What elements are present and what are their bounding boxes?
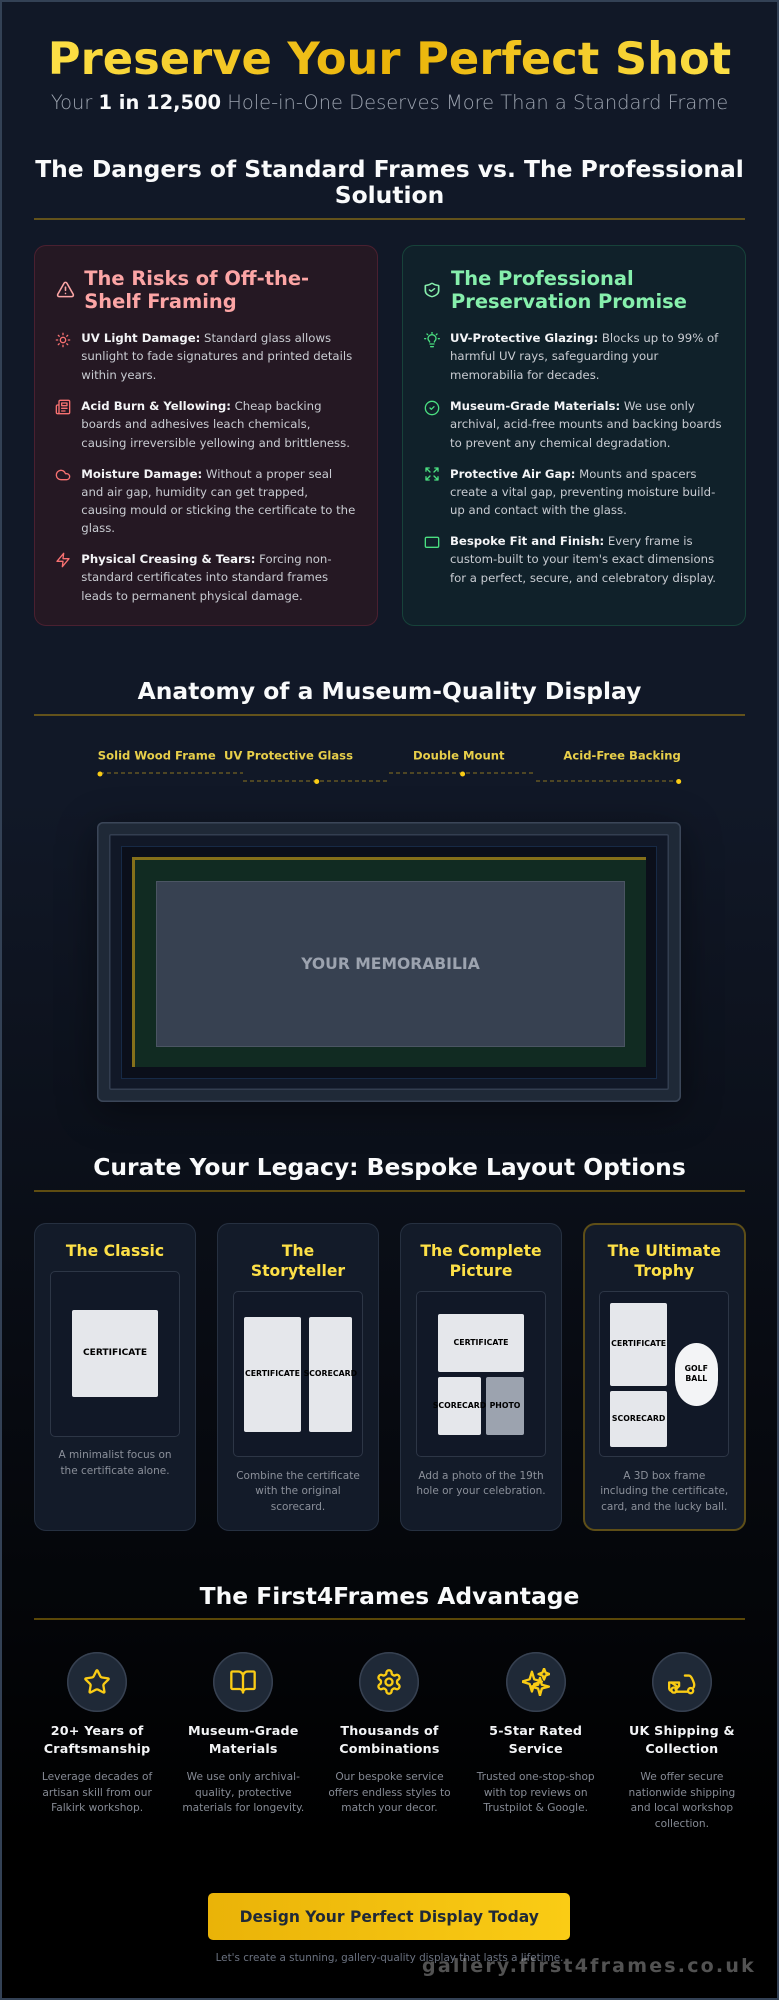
scorecard: SCORECARD (433, 1401, 486, 1410)
text: moisture damage: Moisture Damage: Without a proper seal (81, 467, 332, 481)
advantage title: Craftsmanship (44, 1741, 150, 1756)
advantage text (467, 1770, 605, 1817)
card description: A 3D box frame (623, 1470, 705, 1482)
call to action button: Design Your Perfect Display Today (240, 1908, 539, 1926)
layout diagram (416, 1291, 546, 1457)
card title (608, 1242, 721, 1280)
text: moisture damage: and air gap, humidity can get trapped, (81, 485, 308, 499)
panel heading: Preservation Promise (451, 290, 687, 313)
icon: cloud (56, 470, 70, 480)
frame layer: outer mount (121, 846, 657, 1079)
icon: sun (56, 332, 70, 348)
advantage title: UK Shipping & (629, 1723, 735, 1738)
advantage title (188, 1723, 299, 1756)
label: UV protective glass (224, 748, 390, 784)
golf ball: BALL (685, 1374, 707, 1383)
layout diagram (50, 1271, 180, 1437)
card description: A minimalist focus on (58, 1449, 172, 1461)
panel: professional preservation promise (402, 245, 746, 626)
scorecard: SCORECARD (304, 1369, 357, 1378)
label: double mount (389, 748, 536, 776)
certificate: CERTIFICATE (454, 1338, 508, 1347)
card description: card, and the lucky ball. (601, 1501, 727, 1513)
text: protective air gap: Protective Air Gap: Mounts and spacers (450, 467, 696, 481)
advantage text: nationwide shipping (629, 1787, 735, 1799)
label: double mount: Double Mount (413, 748, 505, 762)
diagram: layered frame (97, 822, 681, 1102)
advantage text: We offer secure (640, 1771, 723, 1783)
panel: risks of off-the-shelf framing (34, 245, 378, 626)
card: the classic (34, 1223, 196, 1531)
advantage title: Combinations (339, 1741, 440, 1756)
text: acid burn: boards and adhesives leach chemicals, (81, 417, 310, 431)
advantage text: materials for longevity. (182, 1802, 304, 1814)
text: museum-grade materials (450, 399, 722, 450)
text: protective air gap (450, 467, 715, 517)
heading: dangers vs solution: The Dangers of Standard Frames vs. The Professional (35, 155, 744, 183)
icon: open book (213, 1652, 273, 1712)
card title: Picture (450, 1262, 512, 1280)
frame layer: inner mount (132, 857, 646, 1067)
card title: The (282, 1242, 314, 1260)
advantage text: match your decor. (341, 1802, 438, 1814)
text: moisture damage: causing mould or sticking the certificate to the (81, 503, 355, 517)
icon: newspaper (56, 400, 70, 414)
advantage text: and local workshop (631, 1802, 733, 1814)
card description (600, 1470, 728, 1513)
card title (420, 1242, 542, 1280)
text: UV glazing: memorabilia for decades. (450, 368, 600, 382)
advantage text: offers endless styles to (328, 1787, 451, 1799)
advantage title: Thousands of (340, 1723, 439, 1738)
anatomy callout labels (98, 748, 682, 784)
text: UV glazing (450, 331, 718, 382)
photo (486, 1377, 524, 1435)
advantage: five-star service (476, 1652, 595, 1814)
text: UV glazing: UV-Protective Glazing: Blocks up to 99% of (450, 331, 718, 345)
icon: sparkles (506, 1652, 566, 1712)
advantage: museum-grade materials (182, 1652, 304, 1814)
icon: star (67, 1652, 127, 1712)
icon: rectangle (424, 536, 440, 548)
text: bespoke fit: for a perfect, secure, and celebratory display. (450, 571, 716, 585)
text: protective air gap: up and contact with the glass. (450, 503, 627, 517)
advantage: UK shipping (619, 1652, 745, 1842)
panel heading: The Risks of Off-the- (84, 267, 309, 290)
scorecard (610, 1391, 667, 1447)
icon: shield check (424, 282, 440, 298)
advantage title: 5-Star Rated (489, 1723, 582, 1738)
card title: Storyteller (251, 1262, 345, 1280)
heading: dangers vs solution (35, 155, 744, 209)
heading: dangers vs solution: Solution (335, 181, 444, 209)
text: UV light damage: within years. (81, 368, 156, 382)
advantage text: quality, protective (195, 1787, 292, 1799)
card title: The Classic (66, 1242, 164, 1260)
card description: including the certificate, (600, 1485, 728, 1497)
advantage title: Museum-Grade (188, 1723, 299, 1738)
advantage text: Trustpilot & Google. (483, 1802, 588, 1814)
text: physical creasing: standard certificates into standard frames (81, 570, 328, 584)
icon: gear (359, 1652, 419, 1712)
panel heading: The Professional (451, 267, 634, 290)
layout diagram (233, 1291, 363, 1457)
icon: scooter (652, 1652, 712, 1712)
panel heading (84, 267, 309, 313)
text: physical creasing: Physical Creasing & Tears: Forcing non- (81, 552, 332, 566)
card title: The Ultimate (608, 1242, 721, 1260)
certificate: CERTIFICATE (245, 1369, 300, 1378)
heading: anatomy: Anatomy of a Museum-Quality Display (138, 677, 641, 705)
text: bespoke fit: Bespoke Fit and Finish: Every frame is (450, 534, 693, 548)
text: moisture damage (81, 467, 355, 535)
heading: layout options: Curate Your Legacy: Bespoke Layout Options (93, 1153, 686, 1181)
frame layer: glass (109, 834, 669, 1090)
card title: The Complete (420, 1242, 542, 1260)
scorecard: SCORECARD (612, 1414, 665, 1423)
text: museum-grade materials: archival, acid-free mounts and backing boards (450, 417, 722, 431)
advantage text: Falkirk workshop. (51, 1802, 143, 1814)
icon: warning triangle (56, 282, 74, 298)
advantage text (182, 1771, 304, 1814)
layout diagram (599, 1291, 729, 1457)
advantage text: with top reviews on (484, 1787, 588, 1799)
card title (251, 1242, 346, 1280)
advantage text: collection. (655, 1818, 709, 1830)
advantage text: artisan skill from our (42, 1787, 152, 1799)
text: museum-grade materials: Museum-Grade Materials: We use only (450, 399, 695, 413)
text: physical creasing (81, 552, 332, 603)
card description: scorecard. (271, 1501, 325, 1513)
card: the storyteller (217, 1223, 379, 1531)
panel heading (451, 267, 687, 313)
text: UV light damage: sunlight to fade signatures and printed details (81, 349, 352, 363)
advantage title (339, 1723, 440, 1756)
golf ball: GOLF (685, 1364, 708, 1373)
icon: expand arrows (425, 467, 439, 481)
heading: advantage: The First4Frames Advantage (200, 1582, 579, 1610)
text: bespoke fit: custom-built to your item's exact dimensions (450, 552, 714, 566)
advantage text: Trusted one-stop-shop (477, 1771, 595, 1783)
text: acid burn (81, 399, 350, 450)
label: solid wood frame (98, 748, 243, 776)
card description (416, 1470, 546, 1497)
text: UV light damage: UV Light Damage: Standard glass allows (81, 331, 331, 345)
scorecard (438, 1377, 481, 1435)
card description (58, 1449, 172, 1477)
certificate (244, 1317, 301, 1432)
advantage text (328, 1771, 451, 1814)
advantage title: Collection (645, 1741, 718, 1756)
text: museum-grade materials: to prevent any chemical degradation. (450, 436, 671, 450)
advantage text: Our bespoke service (335, 1771, 444, 1783)
icon: light bulb (424, 332, 440, 348)
text: acid burn: causing irreversible yellowing and brittleness. (81, 436, 350, 450)
icon: circle check (424, 400, 440, 416)
card description: with the original (255, 1485, 341, 1497)
call to action button (208, 1893, 570, 1940)
card: the ultimate trophy (582, 1223, 746, 1531)
watermark: gallery.first4frames.co.uk (422, 1954, 756, 1976)
text: acid burn: Acid Burn & Yellowing: Cheap backing (81, 399, 322, 413)
card title: Trophy (634, 1262, 694, 1280)
certificate: CERTIFICATE (611, 1339, 666, 1348)
card description: hole or your celebration. (416, 1485, 546, 1497)
advantage text: We use only archival- (187, 1771, 300, 1783)
advantage text (613, 1770, 751, 1833)
label: acid-free backing (536, 748, 681, 784)
icon: lightning (56, 552, 70, 568)
advantage title (613, 1722, 751, 1758)
label: acid-free backing: Acid-Free Backing (563, 748, 681, 762)
subtitle: Your 1 in 12,500 Hole-in-One Deserves More Than a Standard Frame (51, 91, 728, 114)
text: UV light damage (81, 331, 352, 382)
advantage text: Leverage decades of (42, 1771, 152, 1783)
label: UV protective glass: UV Protective Glass (224, 748, 353, 762)
certificate (72, 1310, 158, 1397)
certificate: CERTIFICATE (83, 1348, 147, 1358)
card description: Add a photo of the 19th (418, 1470, 544, 1482)
certificate (438, 1314, 524, 1372)
frame layer: memorabilia: YOUR MEMORABILIA (301, 954, 480, 972)
advantage: thousands of combinations (328, 1652, 451, 1814)
frame layer: memorabilia (156, 881, 625, 1047)
title: Preserve Your Perfect Shot (48, 32, 731, 84)
advantage: years of craftsmanship (42, 1652, 152, 1814)
text: UV glazing: harmful UV rays, safeguarding your (450, 349, 658, 363)
card: the complete picture (400, 1223, 562, 1531)
label: solid wood frame: Solid Wood Frame (98, 748, 216, 762)
scorecard (309, 1317, 352, 1432)
photo: PHOTO (490, 1401, 520, 1410)
call to action note: Let's create a stunning, gallery-quality display that lasts a lifetime. (216, 1952, 563, 1964)
text: physical creasing: leads to permanent physical damage. (81, 589, 303, 603)
panel heading: Shelf Framing (84, 290, 237, 313)
text: protective air gap: create a vital gap, preventing moisture build- (450, 485, 715, 499)
card description: Combine the certificate (236, 1470, 360, 1482)
card description: the certificate alone. (60, 1465, 170, 1477)
card description (236, 1470, 360, 1513)
advantage title: 20+ Years of (51, 1723, 143, 1738)
advantage title: Materials (209, 1741, 278, 1756)
advantage text (42, 1771, 152, 1814)
advantage title (44, 1723, 150, 1756)
text: bespoke fit (450, 534, 716, 585)
advantage title: Service (509, 1741, 563, 1756)
golf ball (675, 1343, 718, 1406)
certificate (610, 1303, 667, 1386)
advantage title (467, 1722, 605, 1758)
text: moisture damage: glass. (81, 521, 115, 535)
